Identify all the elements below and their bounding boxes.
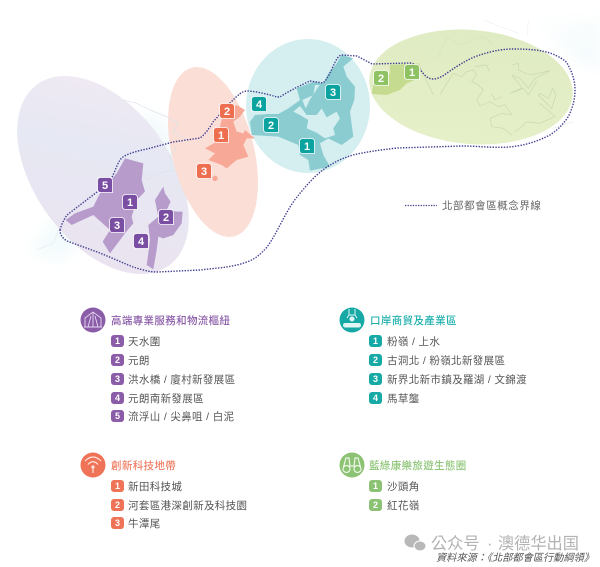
icon: conveyor: [340, 308, 364, 332]
panel: innovation belt: [80, 452, 247, 530]
district shapes: teal: [250, 55, 355, 171]
map marker: purple 1: [122, 194, 138, 210]
panel: blue-green recreation: [340, 452, 467, 512]
list: [111, 335, 235, 423]
list: 粉嶺 / 上水: [387, 336, 440, 348]
panel: logistics hub: [80, 308, 235, 423]
watermark text: 澳德华出国: [498, 535, 579, 553]
icon: wechat watermark: [404, 534, 426, 551]
icon: binoculars: [340, 452, 364, 478]
list: 天水圍: [128, 336, 161, 348]
list: 洪水橋 / 廈村新發展區: [128, 373, 235, 386]
map marker: salmon 2: [220, 104, 234, 118]
list: 1: [115, 336, 120, 346]
watermark text: ·: [487, 535, 492, 553]
list: 牛潭尾: [128, 517, 161, 530]
zone ellipse: salmon: [152, 58, 274, 246]
map marker: salmon 3: [196, 164, 212, 178]
list: 3: [115, 518, 120, 528]
map marker: purple 5: [98, 178, 112, 192]
list: 2: [115, 500, 120, 510]
heading: 口岸商貿及產業區: [370, 314, 457, 327]
list: 紅花嶺: [387, 499, 420, 512]
map marker: green 1: [404, 64, 420, 80]
list: 馬草壟: [387, 392, 420, 405]
list: 古洞北 / 粉嶺北新發展區: [387, 354, 505, 367]
map marker: salmon 3: 3: [201, 166, 207, 178]
zone ellipse: teal: [246, 39, 370, 173]
list: 沙頭角: [387, 480, 420, 493]
map marker: teal 1: [300, 138, 314, 154]
map marker: purple 3: 3: [114, 220, 120, 232]
list: 元朗: [128, 355, 150, 367]
map marker: purple 2: 2: [163, 212, 169, 224]
district shapes: salmon: [205, 105, 255, 181]
district shapes: purple: [66, 158, 183, 269]
map marker: salmon 1: 1: [218, 130, 224, 142]
boundary legend: [405, 199, 541, 212]
boundary legend: 北部都會區概念界線: [442, 199, 541, 212]
source note: 資料來源：《北部都會區行動綱領》: [436, 552, 594, 564]
list: 5: [115, 411, 120, 421]
list: [111, 480, 247, 530]
list: 3: [115, 374, 120, 384]
boundary dotted line: [60, 49, 575, 272]
list: 3: [373, 374, 378, 384]
map marker: purple 3: [110, 218, 124, 232]
map marker: teal 1: 1: [304, 141, 310, 153]
list: 1: [373, 481, 378, 491]
map marker: green 2: [374, 70, 388, 86]
list: [369, 480, 420, 512]
map marker: teal 3: [326, 84, 340, 100]
district shapes: green: [372, 63, 420, 95]
coast outlines: [37, 20, 573, 250]
list: 1: [373, 336, 378, 346]
list: 新界北新市鎮及羅湖 / 文錦渡: [387, 373, 527, 386]
map marker: salmon 2: 2: [224, 106, 230, 118]
map marker: teal 2: [264, 118, 278, 132]
map marker: green 1: 1: [409, 67, 415, 79]
list: 4: [115, 393, 120, 403]
zone ellipse: purple: [0, 44, 224, 306]
heading: 創新科技地帶: [111, 459, 176, 472]
map marker: purple 1: 1: [127, 197, 133, 209]
list: 2: [373, 500, 378, 510]
map marker: purple 5: 5: [102, 180, 108, 192]
list: [369, 335, 527, 405]
zone ellipse: green: [364, 21, 578, 153]
map marker: teal 4: 4: [256, 99, 263, 111]
map marker: purple 2: [158, 210, 174, 224]
list: 2: [115, 355, 120, 365]
map marker: purple 4: [134, 234, 148, 248]
list: 4: [373, 393, 378, 403]
icon: signal: [80, 452, 106, 478]
icon: buildings: [80, 308, 106, 332]
map marker: salmon 1: [214, 128, 228, 142]
watermark text: 公众号: [431, 535, 480, 553]
map marker: green 2: 2: [378, 73, 384, 85]
list: 1: [115, 481, 120, 491]
map marker: teal 2: 2: [268, 120, 274, 132]
list: 元朗南新發展區: [128, 392, 204, 405]
map marker: teal 4: [252, 96, 266, 112]
heading: 高端專業服務和物流樞紐: [111, 314, 230, 327]
map marker: purple 4: 4: [138, 236, 145, 248]
panel: port commerce: [340, 308, 527, 405]
map marker: teal 3: 3: [330, 87, 336, 99]
list: 流浮山 / 尖鼻咀 / 白泥: [128, 410, 235, 423]
list: 河套區港深創新及科技園: [128, 499, 247, 512]
heading: 藍綠康樂旅遊生態圈: [369, 459, 467, 472]
list: 2: [373, 355, 378, 365]
background water wash: [30, 20, 600, 260]
list: 新田科技城: [128, 480, 182, 493]
